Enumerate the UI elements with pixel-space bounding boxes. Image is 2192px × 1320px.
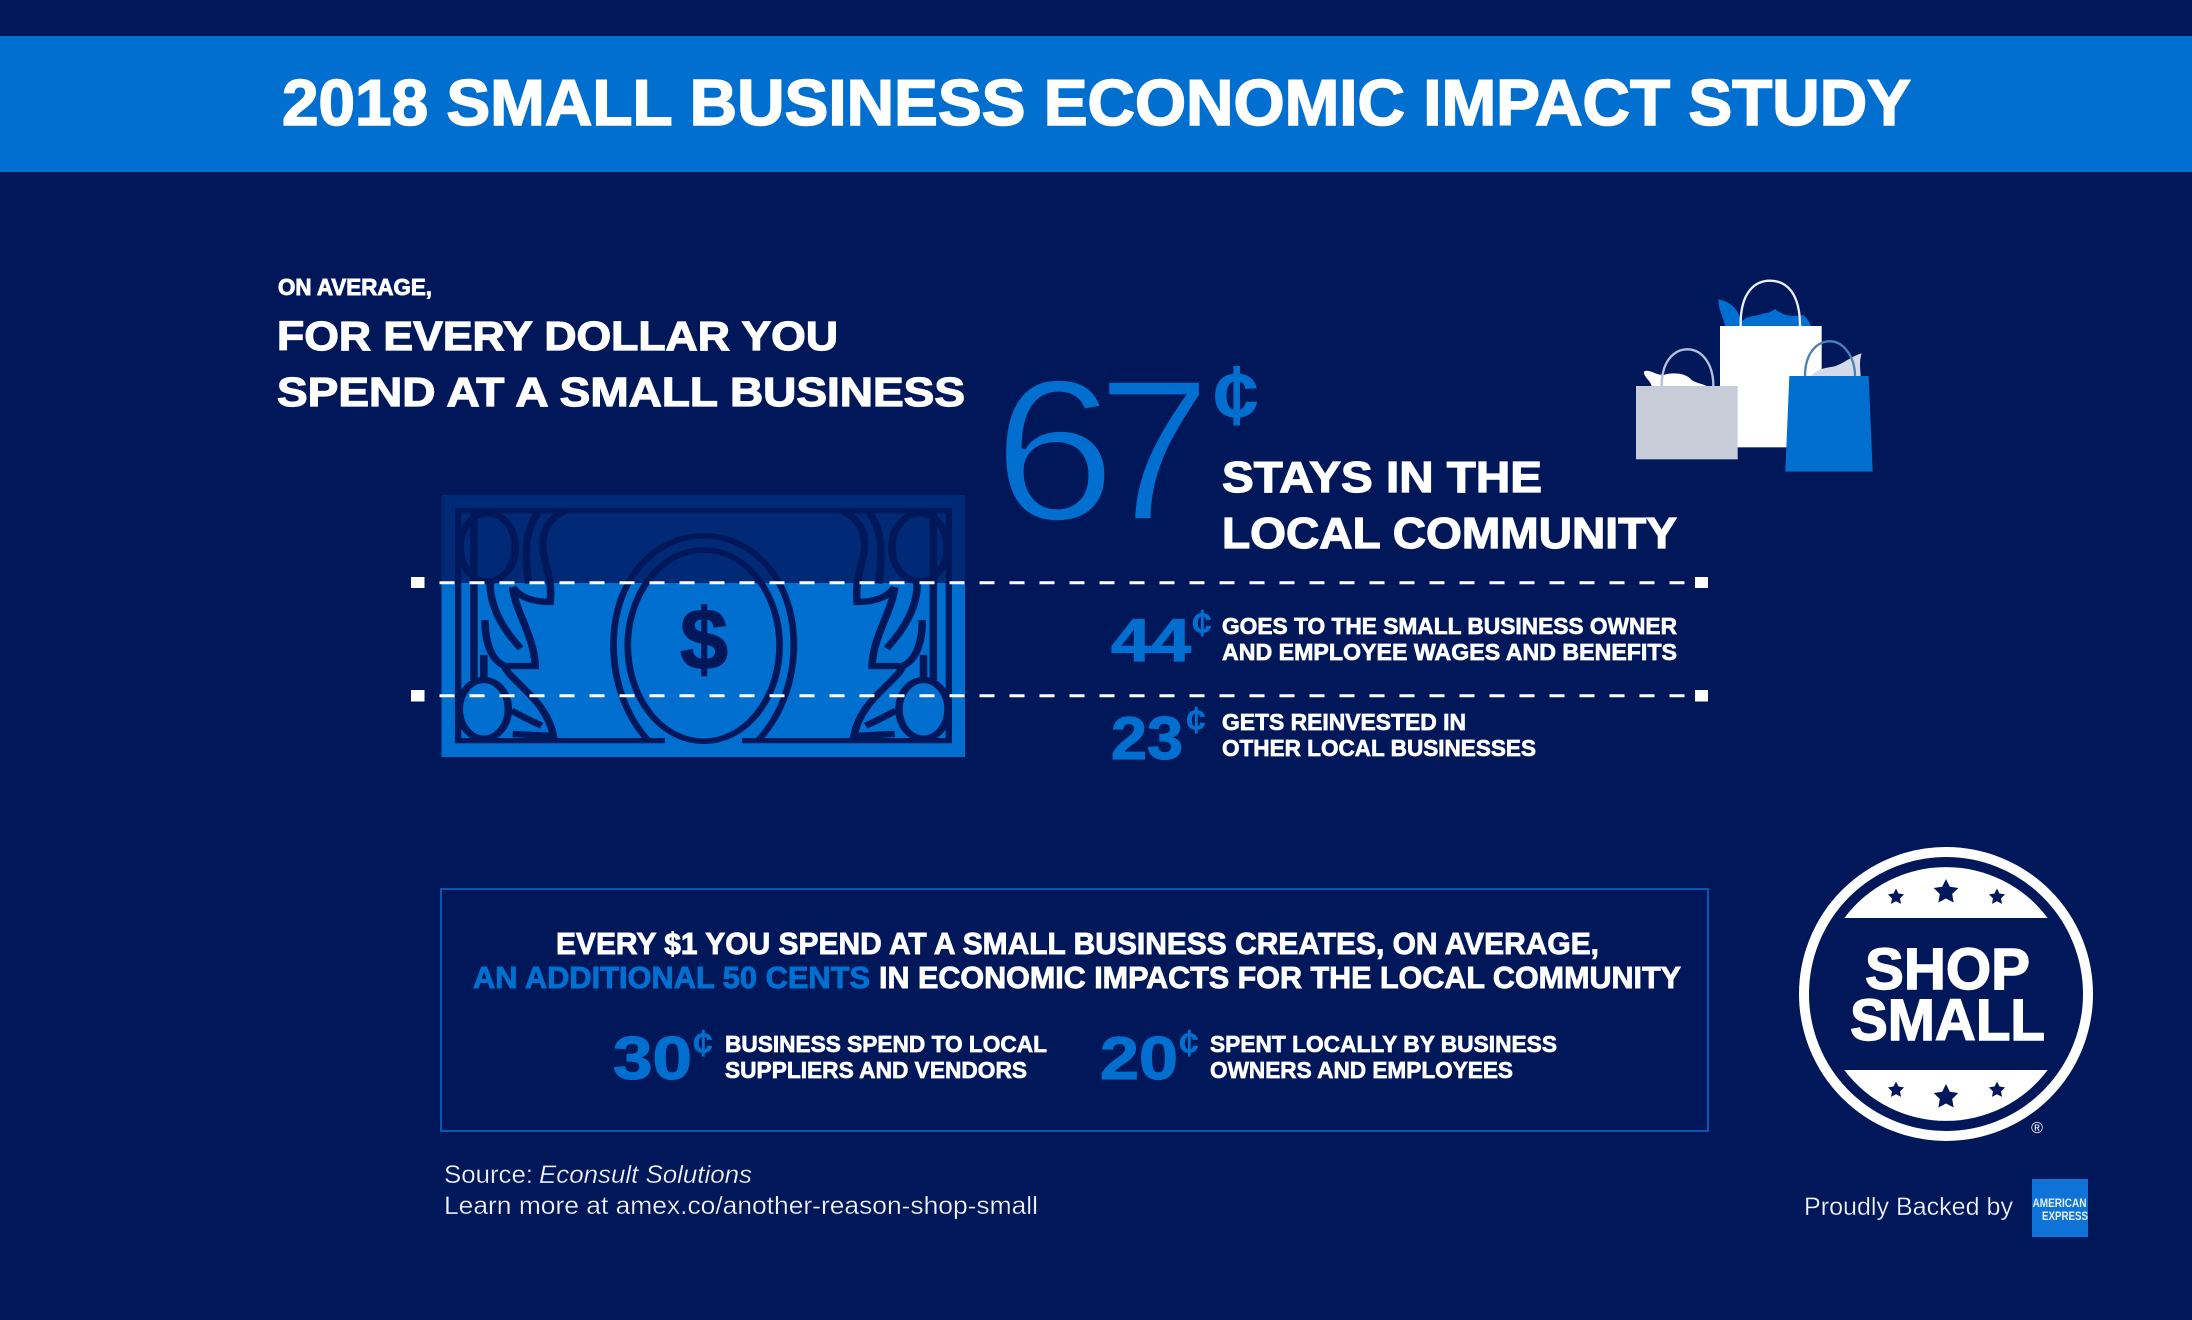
stat: 20 cents: OWNERS AND EMPLOYEES [1210, 1057, 1513, 1083]
stat: 44 cents: 44 [1111, 607, 1192, 674]
stat: 30 cents: 30 [613, 1025, 692, 1092]
badge text: SHOP [1865, 937, 2030, 1002]
stat: 44 cents: GOES TO THE SMALL BUSINESS OWNER [1222, 613, 1677, 639]
panel: additional impact [441, 889, 1708, 1131]
badge text [1850, 937, 2045, 1053]
title banner [0, 36, 2192, 172]
icon: shopping bags [1636, 281, 1873, 472]
stat: 20 cents: SPENT LOCALLY BY BUSINESS [1210, 1031, 1557, 1057]
stat: 30 cents: ¢ [693, 1023, 713, 1065]
badge text: SMALL [1850, 988, 2045, 1053]
stat: 44 cents: AND EMPLOYEE WAGES AND BENEFITS [1222, 639, 1677, 665]
stat label: stays in the local community [1222, 453, 1677, 558]
stat: 23 cents: GETS REINVESTED IN [1222, 709, 1466, 735]
source note [444, 1161, 1038, 1220]
intro heading: FOR EVERY DOLLAR YOU [277, 313, 838, 359]
sponsor: proudly backed by [1804, 1179, 2088, 1237]
stat: 20 cents: 20 [1100, 1025, 1178, 1092]
logo: american express: EXPRESS [2042, 1211, 2088, 1223]
panel heading: EVERY $1 YOU SPEND AT A SMALL BUSINESS CREATES, ON AVERAGE, [556, 926, 1599, 961]
sponsor: proudly backed by: Proudly Backed by [1804, 1193, 2013, 1221]
stat: 44 cents [1111, 603, 1677, 674]
big stat: 67 cents: 6 [993, 337, 1116, 563]
intro heading [277, 274, 965, 415]
big stat: 67 cents: ¢ [1213, 348, 1259, 442]
stars [1888, 879, 2005, 1108]
illustration: dollar bill [442, 495, 965, 757]
dashed connector lines [411, 577, 1708, 702]
stat: 23 cents [1111, 700, 1536, 772]
panel heading [473, 926, 1681, 995]
big stat: 67 cents [993, 337, 1259, 563]
badge: shop small [1804, 852, 2088, 1137]
source note: Econsult Solutions [539, 1161, 752, 1189]
intro heading: SPEND AT A SMALL BUSINESS [277, 369, 965, 415]
left ornament [459, 512, 564, 739]
stat: 23 cents: 23 [1111, 705, 1183, 772]
stat: 20 cents [1100, 1023, 1557, 1092]
dollar sign: $ [680, 592, 728, 688]
right ornament [843, 512, 948, 739]
panel heading: AN ADDITIONAL 50 CENTS [473, 960, 870, 995]
stat: 23 cents: OTHER LOCAL BUSINESSES [1222, 735, 1536, 761]
source note: Learn more at amex.co/another-reason-shop-small [444, 1192, 1038, 1220]
panel heading: IN ECONOMIC IMPACTS FOR THE LOCAL COMMUNITY [879, 960, 1681, 995]
big stat: 67 cents: 7 [1097, 337, 1211, 563]
stat: 20 cents: ¢ [1179, 1023, 1199, 1065]
badge: shop small: ® [2031, 1120, 2043, 1137]
stat label: stays in the local community: LOCAL COMMUNITY [1222, 509, 1677, 558]
stat: 30 cents [613, 1023, 1047, 1092]
logo: american express: AMERICAN [2032, 1198, 2086, 1210]
stat: 30 cents: BUSINESS SPEND TO LOCAL [725, 1031, 1047, 1057]
stat: 44 cents: ¢ [1192, 603, 1212, 645]
stat label: stays in the local community: STAYS IN THE [1222, 453, 1542, 502]
stat: 30 cents: SUPPLIERS AND VENDORS [725, 1057, 1027, 1083]
bill frame [458, 511, 949, 741]
title: 2018 SMALL BUSINESS ECONOMIC IMPACT STUDY [282, 66, 1911, 139]
logo: american express [2032, 1179, 2088, 1237]
center oval [614, 536, 794, 741]
stat: 23 cents: ¢ [1186, 700, 1206, 742]
intro heading: ON AVERAGE, [278, 274, 432, 300]
source note: Source: [444, 1161, 533, 1189]
